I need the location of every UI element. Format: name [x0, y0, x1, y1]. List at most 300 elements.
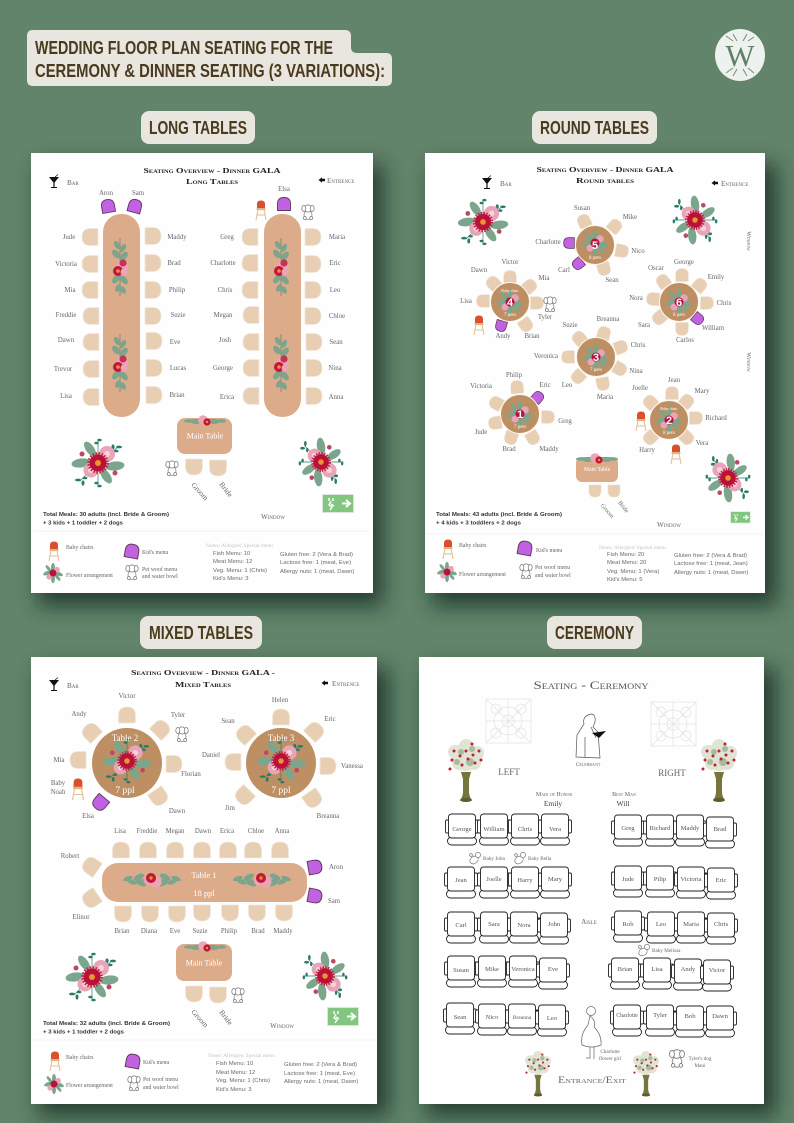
guest names: Maria — [329, 234, 345, 241]
table 5: Charlotte — [535, 239, 561, 246]
guest names: Freddie — [56, 312, 76, 319]
left and right labels: LEFT — [498, 767, 520, 777]
panel: mixed tables — [31, 657, 377, 1104]
heading: ceremony — [547, 616, 642, 649]
table 2: Vera — [696, 440, 708, 447]
guest names: Chris — [218, 287, 233, 294]
seat row 1 left: George — [452, 826, 472, 833]
seat row 2 left — [444, 867, 572, 898]
wedding party: Will — [616, 799, 630, 808]
window labels: Window — [745, 231, 752, 251]
legend: Baby chairs — [459, 543, 487, 549]
table 6: Nora — [629, 295, 643, 302]
table 3: Breanna — [317, 813, 339, 820]
panel shadows — [38, 164, 777, 1116]
guest names: Elsa — [278, 186, 290, 193]
left and right labels — [498, 767, 686, 778]
guest names: Trevor — [54, 366, 73, 373]
menu notes: Notes: Allergies/ Special menu — [208, 1053, 275, 1059]
table 2: Tyler — [171, 712, 186, 719]
logo: W — [725, 38, 755, 73]
legend: Kid's menu — [143, 1060, 169, 1066]
table 1: Maddy — [539, 446, 559, 453]
table 3: Eric — [324, 716, 336, 723]
seat row 1 left: Chris — [518, 826, 533, 833]
menu notes: Gluten free: 2 (Vera & Brad) — [280, 552, 353, 558]
table 4: Victor — [502, 259, 519, 266]
table 4: Baby chair — [501, 288, 519, 293]
seat row 2 right: Pilip — [654, 876, 667, 883]
table 2: Mary — [695, 388, 710, 395]
panel title — [131, 668, 276, 689]
table 5: Nico — [631, 248, 645, 255]
bride and groom seats — [186, 986, 244, 1029]
table 1: Brad — [502, 446, 516, 453]
total meals: Total Meals: 30 adults (incl. Bride & Groom) — [43, 512, 169, 518]
table 1: 7 pers — [514, 425, 526, 430]
panel: ceremony — [419, 657, 764, 1104]
total meals — [43, 512, 169, 526]
table 2: Baby chair — [660, 406, 678, 411]
table 1: 18 ppl — [193, 888, 215, 898]
menu notes: Gluten free: 2 (Vera & Brad) — [674, 553, 747, 559]
table 1: Philip — [506, 372, 523, 379]
table 1: Megan — [166, 828, 185, 835]
menu notes: Notes: Allergies/ Special menu — [206, 543, 273, 549]
seat row 5 right: Charlotte — [616, 1013, 638, 1019]
main title — [27, 30, 392, 86]
table 3: Veronica — [534, 353, 558, 360]
guest names: Philip — [169, 287, 186, 294]
table 2 — [51, 693, 201, 820]
seat row 4 left: Mike — [485, 966, 499, 973]
table 2: Joelle — [632, 385, 648, 392]
seat row 5 right — [610, 1005, 736, 1037]
bride and groom seats — [166, 459, 235, 502]
menu notes: Lactose free: 1 (meat, Jean) — [674, 561, 748, 567]
table 3: Chris — [631, 342, 646, 349]
legend: Pet woof menu — [142, 566, 177, 573]
legend — [436, 540, 571, 582]
seat row 4 right: Andy — [681, 966, 696, 973]
seat row 4 left: Susan — [453, 967, 470, 974]
bar: Bar — [67, 179, 79, 187]
legend: Pet woof menu — [535, 564, 570, 571]
flower girl — [582, 1006, 622, 1062]
menu notes: Allergy nuts: 1 (meat, Dawn) — [280, 569, 354, 575]
ceremony title: Seating - Ceremony — [534, 678, 649, 692]
menu notes: Notes: Allergies/ Special menu — [599, 545, 666, 551]
table 1: Victoria — [470, 383, 492, 390]
table 1: Philip — [221, 928, 238, 935]
menu notes: Meat Menu: 20 — [607, 560, 647, 566]
table 6: William — [702, 325, 725, 332]
guest names: Chloe — [329, 313, 345, 320]
table 3: Daniel — [202, 752, 220, 759]
seat row 1 left — [446, 814, 572, 845]
panel title: Round tables — [576, 176, 634, 185]
seat row 2 left: Mary — [548, 876, 563, 883]
menu notes: Veg. Menu: 1 (Chris) — [216, 1078, 270, 1084]
menu notes — [206, 543, 354, 582]
wedding party: Emily — [544, 799, 562, 808]
seat row 3 right: Maria — [683, 921, 699, 928]
dog — [670, 1050, 712, 1069]
heading: long tables — [141, 111, 255, 144]
entrance: Entrence — [721, 180, 748, 188]
seat row 4 right: Lisa — [651, 966, 663, 973]
table 6: 6 — [676, 297, 682, 309]
bride and groom seats: Groom — [189, 480, 210, 502]
table 3 — [202, 697, 363, 820]
left and right labels: RIGHT — [658, 768, 686, 778]
table 5: Sean — [605, 277, 619, 284]
guest names: Josh — [219, 337, 232, 344]
table 2: Harry — [639, 447, 656, 454]
table 3: 7 ppl — [271, 786, 291, 796]
baby melissa: Baby Melissa — [652, 948, 681, 954]
table 3: Jim — [225, 805, 236, 812]
table 3: Leo — [562, 382, 573, 389]
guest names: Victoria — [55, 261, 77, 268]
table 3: Nina — [629, 368, 643, 375]
guest names: Greg — [220, 234, 234, 241]
guest names: Eric — [329, 260, 341, 267]
seat row 5 right: Tyler — [653, 1012, 668, 1019]
table 2: Elsa — [82, 813, 94, 820]
seat row 3 right: Rob — [622, 921, 634, 928]
table 4: Mia — [539, 275, 549, 282]
guest names: Megan — [214, 312, 233, 319]
heading: round tables — [532, 111, 657, 144]
table 5: Susan — [574, 205, 591, 212]
table 3: Breanna — [597, 316, 619, 323]
table 4: Brian — [524, 333, 540, 340]
exit sign — [730, 511, 751, 523]
menu notes: Fish Menu: 10 — [216, 1061, 254, 1067]
table 1: Lisa — [114, 828, 126, 835]
seat row 2 left: Jean — [455, 877, 468, 884]
seat row 2 left: Harry — [517, 877, 533, 884]
menu notes: Gluten free: 2 (Vera & Brad) — [284, 1062, 357, 1068]
menu notes: Lactose free: 1 (meat, Eve) — [280, 560, 351, 566]
menu notes: Meat Menu: 12 — [213, 559, 252, 565]
panel title: Seating Overview - Dinner GALA - — [131, 668, 276, 677]
table 1: 1 — [517, 409, 523, 421]
guest names — [54, 186, 345, 401]
main table: Main Table — [584, 467, 611, 473]
heading: mixed tables: MIXED TABLES — [149, 622, 253, 643]
seat row 1 right — [612, 815, 736, 848]
guest names: Leo — [330, 287, 341, 294]
table 1: Table 1 — [191, 870, 217, 880]
flower arrangements — [457, 195, 750, 503]
total meals — [436, 512, 562, 526]
legend — [42, 542, 178, 583]
babies row 1 — [468, 852, 552, 865]
exit sign — [322, 494, 354, 513]
total meals: + 3 kids + 1 toddler + 2 dogs — [43, 520, 123, 526]
guest names: Lisa — [60, 393, 72, 400]
legend: Flower arrangement — [66, 1083, 113, 1089]
celebrant: Celebrant — [576, 762, 601, 768]
table 6: Oscar — [648, 265, 665, 272]
legend: Kid's menu — [536, 548, 562, 554]
table 2: 8 pers — [663, 431, 675, 436]
table 3: Vanessa — [341, 763, 363, 770]
table 1: Elinor — [72, 914, 90, 921]
seat row 4 right: Brian — [618, 966, 633, 973]
right long table — [264, 214, 301, 417]
guest names: Aron — [99, 190, 114, 197]
table 1: Robert — [61, 853, 79, 860]
table 6: George — [674, 259, 694, 266]
bride and groom seats: Bride — [217, 1008, 235, 1027]
guest names: George — [213, 365, 233, 372]
table 1: Maddy — [273, 928, 293, 935]
seat row 5 left: Nico — [486, 1014, 499, 1021]
panel title: Long Tables — [186, 177, 238, 186]
guest names: Brad — [167, 260, 181, 267]
table 2 — [632, 377, 727, 464]
legend: and water bowl — [143, 1085, 179, 1091]
table 3: Table 3 — [268, 733, 295, 743]
panel title — [536, 165, 674, 185]
seat row 3 left: John — [548, 921, 561, 928]
seat row 5 right: Dawn — [712, 1013, 729, 1020]
guest names: Suzie — [170, 312, 186, 319]
table 6: Sara — [638, 322, 650, 329]
window labels: Window — [745, 352, 752, 372]
heading: mixed tables — [140, 616, 262, 649]
entrance: Entrence — [332, 680, 359, 688]
seat row 3 right — [612, 911, 738, 944]
table 6 — [629, 259, 732, 344]
table 1: Chloe — [248, 828, 264, 835]
seat row 2 right: Jude — [622, 876, 634, 883]
table 3: 7 pers — [590, 368, 602, 373]
seat row 3 left: Carl — [455, 922, 467, 929]
guest names: Anna — [329, 394, 343, 401]
table 5: Mike — [623, 214, 637, 221]
table 1: Freddie — [137, 828, 157, 835]
dog: Maui — [695, 1063, 706, 1069]
window labels — [745, 231, 752, 372]
heading: ceremony: CEREMONY — [555, 622, 634, 643]
main table — [177, 415, 232, 454]
panel title: Seating Overview - Dinner GALA — [144, 166, 281, 175]
guest names: Eve — [170, 339, 180, 346]
dog: Tyler's dog — [689, 1056, 712, 1062]
flower arrangements — [65, 951, 347, 1001]
table 6: Chris — [717, 300, 732, 307]
menu notes: Veg. Menu: 1 (Vera) — [607, 569, 659, 575]
bar: Bar — [500, 180, 512, 188]
panel title — [144, 166, 281, 186]
seat row 2 left: Joelle — [486, 876, 502, 883]
left long table — [103, 214, 140, 417]
table 2: Jean — [668, 377, 681, 384]
seat row 3 left: Nora — [517, 922, 531, 929]
table 3: Sean — [221, 718, 235, 725]
seat row 1 right: Greg — [621, 825, 635, 832]
table 1: Eric — [539, 382, 551, 389]
bride and groom seats — [589, 485, 629, 520]
guest names: Sean — [329, 339, 343, 346]
seat row 1 left: William — [483, 826, 506, 833]
seat row 5 right: Bob — [684, 1013, 696, 1020]
menu notes: Veg. Menu: 1 (Chris) — [213, 568, 267, 574]
table 5: 5 — [592, 240, 598, 252]
total meals: + 3 kids + 1 toddler + 2 dogs — [43, 1030, 124, 1036]
seat row 2 right — [612, 866, 738, 899]
table 1: Greg — [558, 418, 572, 425]
bride and groom seats: Bride — [217, 480, 235, 499]
seat row 3 right: Leo — [656, 921, 667, 928]
seat row 3 left: Sara — [488, 921, 500, 928]
seat row 4 right: Victor — [709, 967, 726, 974]
seat row 4 left — [444, 956, 570, 989]
table 5: Carl — [558, 267, 570, 274]
panel: round tables — [425, 153, 765, 593]
table 3: Suzie — [562, 322, 578, 329]
aisle label: Aisle — [581, 918, 597, 926]
bar: Bar — [67, 682, 79, 690]
table 3: 3 — [593, 352, 599, 364]
seat row 2 right: Eric — [716, 877, 727, 884]
bar — [49, 678, 79, 691]
seat row 4 right — [608, 958, 734, 991]
table 5 — [535, 205, 645, 284]
table 2: Richard — [705, 415, 727, 422]
legend: Pet woof menu — [143, 1076, 178, 1083]
celebrant — [576, 714, 606, 768]
seat row 3 right: Chris — [714, 921, 729, 928]
table 4: Andy — [495, 333, 511, 340]
guest names: Sam — [132, 190, 145, 197]
table 1: Diana — [141, 928, 157, 935]
legend: Flower arrangement — [459, 572, 506, 578]
table 2: Dawn — [169, 808, 186, 815]
main title: WEDDING FLOOR PLAN SEATING FOR THE — [35, 37, 333, 58]
table 2: 2 — [666, 415, 672, 427]
seat row 1 right: Richard — [650, 825, 671, 832]
table 1 — [61, 828, 344, 935]
total meals — [43, 1021, 170, 1036]
seat row 1 left: Vera — [549, 826, 561, 833]
guest names: Dawn — [58, 337, 75, 344]
bride and groom seats: Bride — [616, 500, 629, 515]
table 2: Table 2 — [112, 733, 138, 743]
table 1: Erica — [220, 828, 234, 835]
menu notes: Kid's Menu: 3 — [213, 576, 249, 582]
menu notes: Fish Menu: 10 — [213, 551, 251, 557]
main table: Main Table — [186, 958, 223, 968]
seat row 5 left — [444, 1003, 568, 1036]
table 1 — [470, 372, 572, 453]
table 1: Eve — [170, 928, 180, 935]
table 1: Brad — [251, 928, 265, 935]
flower arrangements — [71, 437, 343, 487]
bar — [49, 174, 79, 188]
table 1: Aron — [329, 864, 344, 871]
bride and groom seats: Groom — [189, 1007, 210, 1029]
total meals: Total Meals: 43 adults (incl. Bride & Groom) — [436, 512, 562, 518]
chairs — [82, 228, 322, 406]
table 4: 4 — [507, 297, 514, 309]
flower girl: flower girl — [599, 1055, 622, 1062]
seat row 5 left: Breanna — [513, 1015, 532, 1021]
seat row 1 right: Brad — [714, 826, 727, 833]
table 6: Emily — [708, 274, 725, 281]
bar — [482, 176, 512, 189]
seat row 1 right: Maddy — [681, 825, 700, 832]
window label: Window — [270, 1022, 294, 1030]
guest names: Nina — [328, 365, 342, 372]
baby melissa — [637, 944, 681, 957]
panel: long tables — [31, 153, 373, 593]
legend: and water bowl — [142, 574, 178, 580]
total meals: Total Meals: 32 adults (incl. Bride & Groom) — [43, 1021, 170, 1027]
table 2: Florian — [181, 771, 201, 778]
wedding party: Maid of Honor — [536, 792, 572, 798]
wedding party — [536, 792, 636, 808]
table 2: Victor — [119, 693, 136, 700]
table 4 — [460, 259, 556, 340]
table 1: Dawn — [195, 828, 212, 835]
babies row 1: Baby Bella — [528, 856, 552, 862]
total meals: + 4 kids + 3 toddlers + 2 dogs — [436, 520, 521, 526]
table 2: Baby — [51, 780, 66, 787]
table 1: Jude — [475, 429, 487, 436]
legend — [43, 1052, 179, 1094]
main title: CEREMONY & DINNER SEATING (3 VARIATIONS): — [35, 60, 385, 81]
logo — [715, 29, 765, 81]
entrance vases — [525, 1051, 659, 1096]
main table: Main Table — [187, 432, 224, 440]
menu notes — [599, 545, 748, 583]
table 1: Sam — [328, 898, 341, 905]
legend: Baby chairs — [66, 1055, 94, 1061]
menu notes: Fish Menu: 20 — [607, 552, 645, 558]
table 2: Noah — [51, 789, 66, 796]
seat row 5 left: Sean — [454, 1014, 467, 1021]
babies row 1: Baby John — [483, 856, 505, 862]
legend: and water bowl — [535, 573, 571, 579]
stained glass windows — [486, 699, 696, 746]
guest names: Erica — [220, 394, 234, 401]
seat row 4 left: Eve — [548, 966, 558, 973]
table 3: Helen — [272, 697, 289, 704]
legend: Kid's menu — [142, 550, 168, 556]
guest names: Mia — [65, 287, 75, 294]
exit sign — [327, 1007, 359, 1026]
table 2: 7 ppl — [115, 786, 135, 796]
table 3: Maria — [597, 394, 613, 401]
table 4: 7 pers — [504, 313, 516, 318]
table 4: Lisa — [460, 298, 472, 305]
menu notes: Kid's Menu: 5 — [607, 577, 643, 583]
seat row 4 left: Veronica — [511, 966, 535, 973]
seat row 3 left — [444, 912, 570, 944]
guest names: Brian — [169, 392, 185, 399]
window label: Window — [261, 513, 285, 521]
menu notes: Allergy nuts: 1 (meat, Dawn) — [284, 1079, 358, 1085]
entrance: Entrence — [327, 177, 354, 185]
main table — [176, 941, 232, 981]
menu notes — [208, 1053, 358, 1093]
table 1: Brian — [114, 928, 130, 935]
